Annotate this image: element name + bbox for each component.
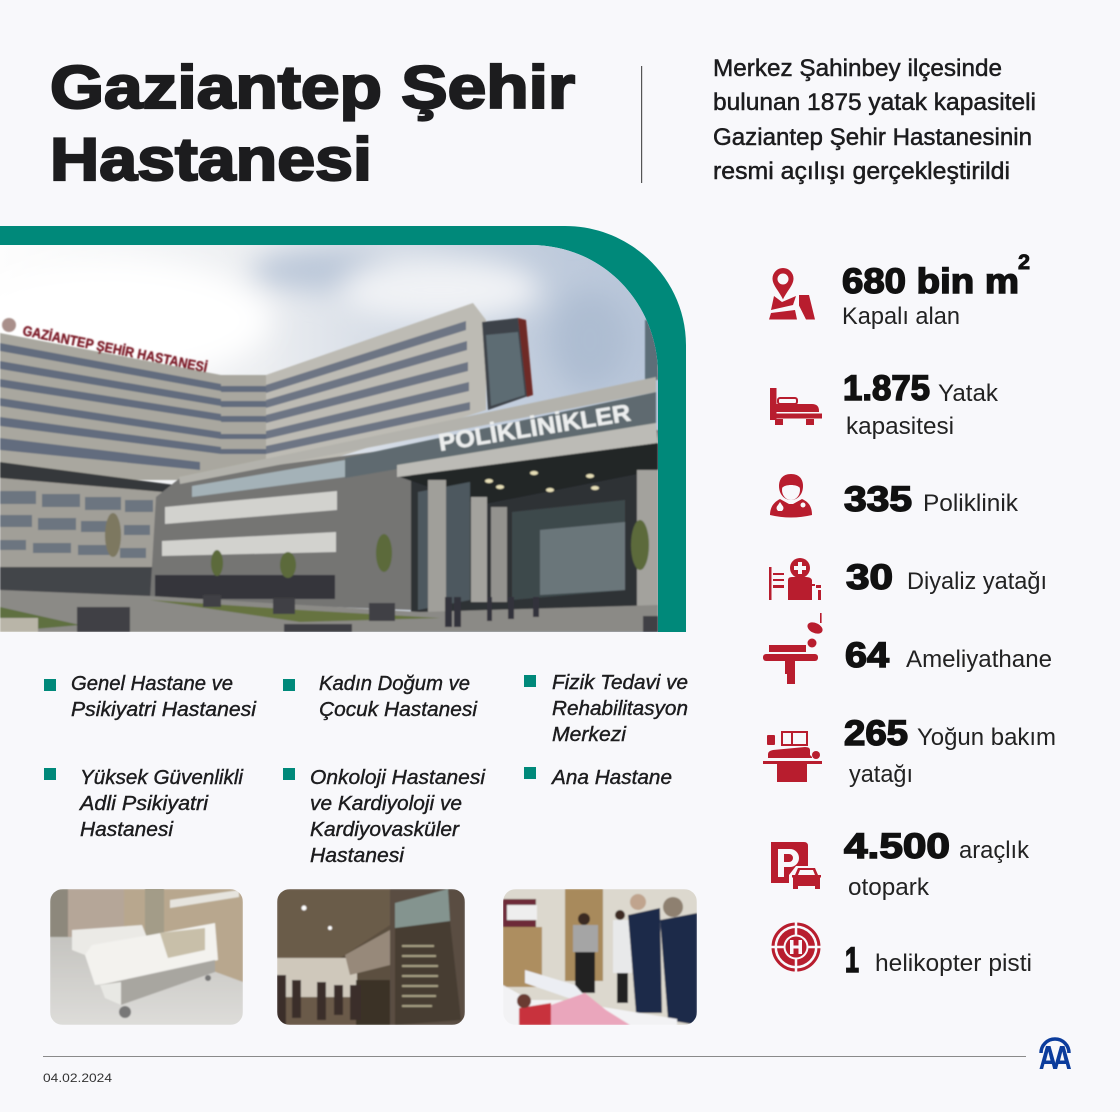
- intro text: Merkez Şahinbey ilçesinde: [713, 55, 1002, 82]
- icon: intensive care: [763, 731, 822, 782]
- list: hospital units: Hastanesi: [310, 845, 405, 867]
- tower: [482, 318, 531, 410]
- stat: operating rooms: [763, 613, 1052, 684]
- entrance: [411, 430, 658, 632]
- stat: beds: kapasitesi: [846, 413, 954, 440]
- list: hospital units: Genel Hastane ve: [71, 673, 233, 695]
- AA logo: [1040, 1039, 1071, 1069]
- list: hospital units: Hastanesi: [80, 819, 174, 841]
- list: hospital units: Rehabilitasyon: [552, 698, 688, 720]
- icon: helipad: [771, 922, 821, 972]
- list: hospital units: [44, 672, 688, 867]
- list: hospital units: Çocuk Hastanesi: [319, 699, 478, 721]
- stat: beds: Yatak: [938, 380, 999, 407]
- stat: closed area: 680 bin m: [842, 262, 1019, 301]
- icon: doctor: [770, 474, 812, 518]
- POLIKLINIKLER sign: POLİKLİNİKLER: [437, 400, 633, 457]
- stat: operating rooms: 64: [845, 636, 890, 675]
- stat: polyclinics: 335: [844, 480, 912, 519]
- teal frame: [0, 226, 686, 632]
- list: hospital units: Kadın Doğum ve: [319, 673, 470, 695]
- icon: bed: [770, 388, 822, 425]
- stat: intensive care beds: [763, 714, 1056, 788]
- intro text: Gaziantep Şehir Hastanesinin: [713, 124, 1032, 151]
- lower left wing: [0, 465, 188, 590]
- list: hospital units: Onkoloji Hastanesi: [310, 767, 486, 789]
- stat: helipad: helikopter pisti: [875, 950, 1032, 977]
- sign: GAZİANTEP ŞEHİR HASTANESİ: [21, 322, 209, 375]
- title: Hastanesi: [50, 126, 372, 193]
- icon: map pin: [769, 268, 815, 320]
- stat: dialysis beds: Diyaliz yatağı: [907, 568, 1047, 595]
- icon: operating table: [763, 613, 824, 684]
- stat: intensive care beds: 265: [844, 714, 908, 753]
- stat: dialysis beds: 30: [846, 558, 893, 597]
- ground: [0, 590, 658, 632]
- icon: parking and car: [771, 842, 822, 890]
- right wing: [266, 303, 486, 480]
- intro text: bulunan 1875 yatak kapasiteli: [713, 89, 1036, 116]
- icon: dialysis: [769, 558, 821, 600]
- photo: patient room: [50, 888, 243, 1025]
- stat: polyclinics: [770, 474, 1019, 519]
- stat: helipad: 1: [845, 941, 859, 980]
- list: hospital units: Ana Hastane: [551, 767, 672, 789]
- main photo: hospital building: [0, 245, 658, 635]
- list: hospital units: Psikiyatri Hastanesi: [71, 699, 257, 721]
- left wing: [0, 333, 266, 480]
- stat: dialysis beds: [769, 558, 1047, 600]
- stat: helipad: [771, 922, 1032, 980]
- podium: [150, 447, 411, 610]
- list: hospital units: Yüksek Güvenlikli: [80, 767, 244, 789]
- intro text: [713, 55, 1036, 185]
- photo: official visit: [503, 889, 697, 1025]
- photo: hospital corridor: [277, 889, 465, 1025]
- stat: closed area: [769, 251, 1030, 330]
- list: hospital units: Fizik Tedavi ve: [552, 672, 688, 694]
- stat: parking: 4.500: [844, 827, 950, 866]
- stat: beds: [770, 369, 999, 440]
- list: hospital units: Kardiyovasküler: [310, 819, 460, 841]
- stat: intensive care beds: yatağı: [849, 761, 913, 788]
- stat: intensive care beds: Yoğun bakım: [917, 724, 1056, 751]
- title: Gaziantep Şehir: [50, 54, 575, 121]
- list: hospital units: ve Kardiyoloji ve: [310, 793, 462, 815]
- stat: closed area: 2: [1018, 251, 1030, 274]
- intro text: resmi açılışı gerçekleştirildi: [713, 158, 1010, 185]
- date: 04.02.2024: [43, 1071, 112, 1085]
- list: hospital units: Adli Psikiyatri: [79, 793, 209, 815]
- stat: beds: 1.875: [843, 369, 930, 408]
- stat: polyclinics: Poliklinik: [923, 490, 1019, 517]
- stat: operating rooms: Ameliyathane: [906, 646, 1052, 673]
- stat: parking: araçlık: [959, 837, 1030, 864]
- list: hospital units: Merkezi: [552, 724, 627, 746]
- stat: parking: otopark: [848, 874, 930, 901]
- stat: closed area: Kapalı alan: [842, 303, 960, 330]
- stat: parking: [771, 827, 1030, 901]
- title: [50, 54, 575, 193]
